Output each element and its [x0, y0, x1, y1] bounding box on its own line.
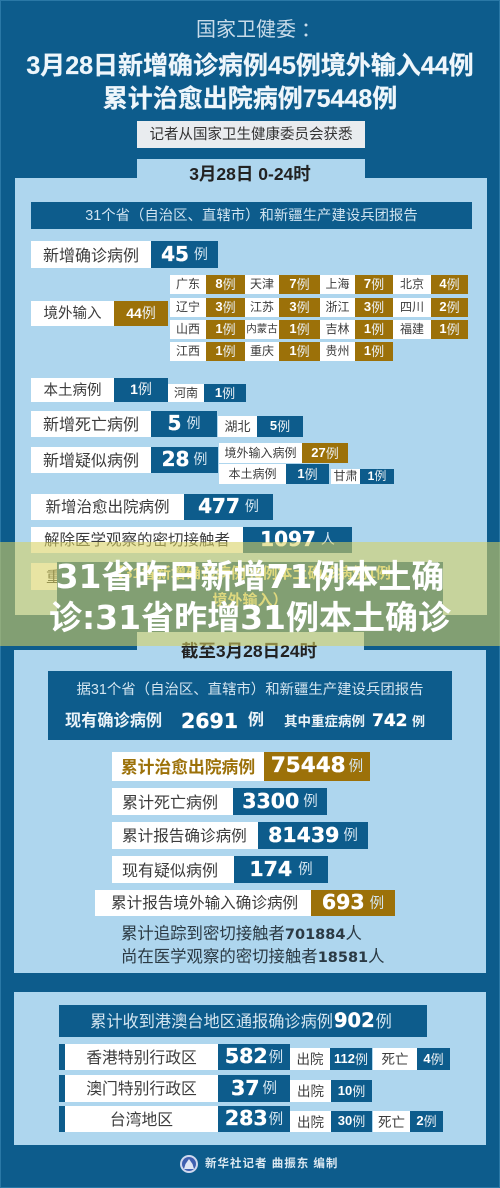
current confirmed box: [48, 671, 452, 740]
severe value: 742: [372, 711, 408, 731]
header: source: 国家卫健委：: [196, 19, 321, 41]
row: Taiwan: 台湾地区: [110, 1112, 173, 1129]
imported by province grid: 例: [371, 300, 384, 315]
panel: cumulative figures: [14, 650, 486, 973]
current confirmed unit: 例: [248, 712, 264, 729]
row: total imported: 例: [370, 896, 384, 912]
suspected breakdown: 例: [305, 467, 318, 482]
imported by province grid: 例: [447, 277, 460, 292]
suspected breakdown: 27: [311, 445, 326, 460]
panel: daily figures: [15, 178, 487, 615]
row: current suspected: 174: [249, 857, 292, 881]
row: Hong Kong: 死亡: [382, 1052, 408, 1067]
imported by province grid: 山西: [176, 322, 200, 336]
row: local cases: 例: [222, 386, 235, 401]
imported by province grid: 1: [364, 321, 371, 336]
imported by province grid: 例: [223, 300, 236, 315]
row: current suspected: 现有疑似病例: [122, 863, 218, 880]
imported by province grid: 2: [439, 299, 447, 314]
imported by province grid: 1: [289, 321, 297, 336]
row: local cases: [31, 378, 246, 402]
imported by province grid: 福建: [400, 322, 424, 336]
title: 3月28日新增确诊病例45例境外输入44例: [26, 52, 474, 80]
panel tab: date: 3月28日 0-24时: [189, 164, 311, 184]
HK Macao Taiwan heading bar: 累计收到港澳台地区通报确诊病例 例: [90, 1013, 392, 1031]
row: Macao: 例: [352, 1084, 365, 1099]
source note: 记者从国家卫生健康委员会获悉: [150, 127, 352, 143]
close contacts text: 尚在医学观察的密切接触者18581人: [121, 948, 385, 966]
row: total imported: [95, 890, 395, 916]
icon: Xinhua emblem: [180, 1155, 198, 1173]
note box: 【31省新增确诊病例45例本土确诊病例1例: [109, 565, 391, 582]
row: Taiwan: 例: [352, 1114, 365, 1129]
row: new recovered: [31, 494, 273, 520]
imported by province grid: 吉林: [325, 322, 350, 336]
row: local cases: 例: [138, 381, 152, 397]
row: total confirmed: 累计报告确诊病例: [122, 828, 247, 845]
row: total recovered: 例: [349, 759, 363, 775]
row: Taiwan: 例: [424, 1114, 437, 1129]
overlay banner: [0, 542, 500, 646]
HK Macao Taiwan heading bar: 902: [334, 1009, 375, 1032]
overlay headline: 31省昨日新增71例本土确: [56, 557, 444, 596]
suspected breakdown: [219, 443, 394, 484]
row: Hong Kong: 例: [355, 1052, 368, 1067]
row: Hong Kong: [59, 1044, 450, 1070]
imported by province grid: 四川: [400, 300, 424, 314]
daily heading bar: 31个省（自治区、直辖市）和新疆生产建设兵团报告: [85, 208, 418, 224]
row: new suspected: 新增疑似病例: [43, 453, 139, 470]
row: new deaths: 新增死亡病例: [43, 417, 139, 434]
imported by province grid: 例: [371, 344, 384, 359]
row: new recovered: 477: [198, 494, 240, 518]
row: new deaths: 5: [270, 418, 277, 433]
panel tab: cumulative date: 截至3月28日24时: [181, 641, 317, 661]
imported by province grid: 例: [297, 344, 310, 359]
row: Macao: 37: [231, 1076, 260, 1100]
row: total deaths: [112, 788, 327, 815]
row: Hong Kong: 例: [431, 1052, 444, 1067]
overlay headline: 诊:31省昨增31例本土确诊: [49, 598, 451, 637]
imported by province grid: 例: [371, 322, 384, 337]
row: Macao: 例: [263, 1081, 277, 1097]
row: Macao: 10: [338, 1083, 352, 1098]
row: released from observation: 人: [321, 531, 335, 547]
imported by province grid: 例: [297, 277, 310, 292]
row: current suspected: [112, 856, 328, 883]
row: imported: [31, 301, 168, 326]
row: total deaths: 累计死亡病例: [122, 795, 218, 812]
imported by province grid: 广东: [176, 277, 200, 291]
imported by province grid: 3: [215, 299, 223, 314]
row: new deaths: 湖北: [224, 419, 250, 434]
suspected breakdown: 例: [326, 446, 339, 461]
row: local cases: 1: [215, 385, 222, 400]
row: new deaths: 例: [277, 419, 290, 434]
row: Taiwan: 例: [269, 1112, 283, 1128]
row: new confirmed: 新增确诊病例: [43, 248, 139, 265]
severe label: 其中重症病例: [284, 714, 365, 729]
row: Hong Kong: 出院: [296, 1052, 324, 1067]
imported by province grid: 7: [364, 276, 371, 291]
current confirmed value: 2691: [181, 709, 238, 733]
row: Macao: [59, 1075, 372, 1102]
severe unit: 例: [412, 714, 425, 729]
row: Hong Kong: 4: [423, 1051, 431, 1066]
suspected breakdown: 1: [368, 469, 374, 483]
row: new confirmed: [31, 241, 218, 268]
row: total deaths: 例: [303, 794, 318, 810]
row: total confirmed: 例: [343, 828, 358, 844]
imported by province grid: 8: [215, 276, 223, 291]
title: 累计治愈出院病例75448例: [103, 85, 397, 113]
row: Hong Kong: 582: [225, 1044, 268, 1068]
row: Macao: 出院: [297, 1084, 324, 1099]
row: Hong Kong: 例: [269, 1050, 283, 1066]
panel tab: date: [137, 159, 365, 183]
overlay headline: [49, 557, 451, 637]
imported by province grid: 浙江: [325, 300, 350, 314]
row: Taiwan: 死亡: [378, 1115, 405, 1130]
suspected breakdown: 本土病例: [228, 467, 276, 481]
imported by province grid: 上海: [325, 277, 350, 291]
row: Hong Kong: 香港特别行政区: [86, 1050, 197, 1067]
imported by province grid: 例: [223, 277, 236, 292]
row: new recovered: 新增治愈出院病例: [45, 499, 170, 516]
row: Macao: 澳门特别行政区: [86, 1081, 197, 1098]
suspected breakdown: 境外输入病例: [224, 446, 296, 460]
row: total imported: 累计报告境外输入确诊病例: [111, 895, 298, 912]
footer credit: 新华社记者 曲振东 编制: [205, 1158, 338, 1170]
imported by province grid: 1: [215, 343, 223, 358]
imported by province grid: 例: [297, 322, 310, 337]
imported by province grid: 例: [223, 344, 236, 359]
row: total confirmed: [112, 822, 368, 849]
imported by province grid: 辽宁: [176, 300, 200, 314]
row: new suspected: 28: [162, 447, 189, 471]
imported by province grid: 1: [439, 321, 447, 336]
HK Macao Taiwan heading bar: [59, 1005, 427, 1037]
row: released from observation: 1097: [260, 527, 316, 551]
imported by province grid: 1: [289, 343, 297, 358]
row: new confirmed: 例: [194, 246, 208, 262]
imported by province grid: 3: [289, 299, 297, 314]
row: new deaths: [31, 411, 303, 437]
row: total deaths: 3300: [242, 789, 299, 813]
note box: 境外输入）: [212, 592, 288, 609]
row: total confirmed: 81439: [268, 823, 339, 847]
row: new confirmed: 45: [161, 242, 189, 266]
imported by province grid: 重庆: [250, 344, 274, 358]
panel: Hong Kong Macao Taiwan: [14, 992, 486, 1145]
row: new deaths: 例: [186, 415, 200, 431]
imported by province grid: 1: [215, 321, 223, 336]
box heading: 据31个省（自治区、直辖市）和新疆生产建设兵团报告: [76, 682, 424, 698]
row: total recovered: 75448: [271, 753, 346, 778]
row: Taiwan: [59, 1106, 443, 1132]
row: imported: 例: [142, 305, 156, 321]
imported by province grid: 天津: [250, 277, 274, 291]
row: local cases: 1: [130, 381, 138, 397]
title: [26, 52, 474, 113]
row: new suspected: [31, 447, 218, 473]
row: imported: 境外输入: [44, 306, 102, 322]
row: Taiwan: 30: [338, 1113, 352, 1128]
row: total recovered: [112, 752, 370, 781]
current confirmed label: 现有确诊病例: [65, 712, 162, 730]
close contacts text: 累计追踪到密切接触者701884人: [121, 925, 362, 943]
suspected breakdown: 甘肃: [333, 469, 358, 483]
imported by province grid: 内蒙古: [246, 323, 278, 335]
row: total recovered: 累计治愈出院病例: [121, 758, 255, 777]
row: imported: 44: [126, 305, 142, 321]
imported by province grid: 4: [439, 276, 447, 291]
row: local cases: 河南: [174, 386, 198, 400]
row: new suspected: 例: [193, 451, 207, 467]
panel tab: cumulative date: [137, 632, 364, 662]
imported by province grid: 例: [223, 322, 236, 337]
imported by province grid: 例: [447, 322, 460, 337]
imported by province grid: 江苏: [250, 300, 274, 314]
imported by province grid: 江西: [176, 344, 200, 358]
row: current suspected: 例: [298, 862, 313, 878]
row: Hong Kong: 112: [334, 1051, 355, 1066]
imported by province grid: 北京: [400, 277, 424, 291]
row: released from observation: 解除医学观察的密切接触者: [44, 532, 230, 549]
row: total imported: 693: [322, 890, 365, 914]
imported by province grid: 贵州: [325, 344, 350, 358]
imported by province grid: 1: [364, 343, 371, 358]
row: new deaths: 5: [168, 411, 181, 435]
row: released from observation: [31, 527, 352, 553]
suspected breakdown: 例: [374, 469, 386, 483]
imported by province grid: 例: [371, 277, 384, 292]
close contacts text: [121, 924, 385, 966]
imported by province grid: 7: [289, 276, 297, 291]
source note: [137, 121, 365, 148]
imported by province grid: 3: [364, 299, 371, 314]
row: Taiwan: 2: [416, 1113, 424, 1128]
row: local cases: 本土病例: [44, 383, 102, 399]
row: Taiwan: 出院: [297, 1115, 324, 1130]
daily heading bar: [31, 202, 472, 229]
imported by province grid: 例: [297, 300, 310, 315]
imported by province grid: 例: [447, 300, 460, 315]
row: Taiwan: 283: [225, 1106, 268, 1130]
imported by province grid: [170, 275, 468, 361]
row: new recovered: 例: [245, 498, 259, 514]
note box: [57, 562, 443, 616]
suspected breakdown: 1: [297, 466, 305, 481]
